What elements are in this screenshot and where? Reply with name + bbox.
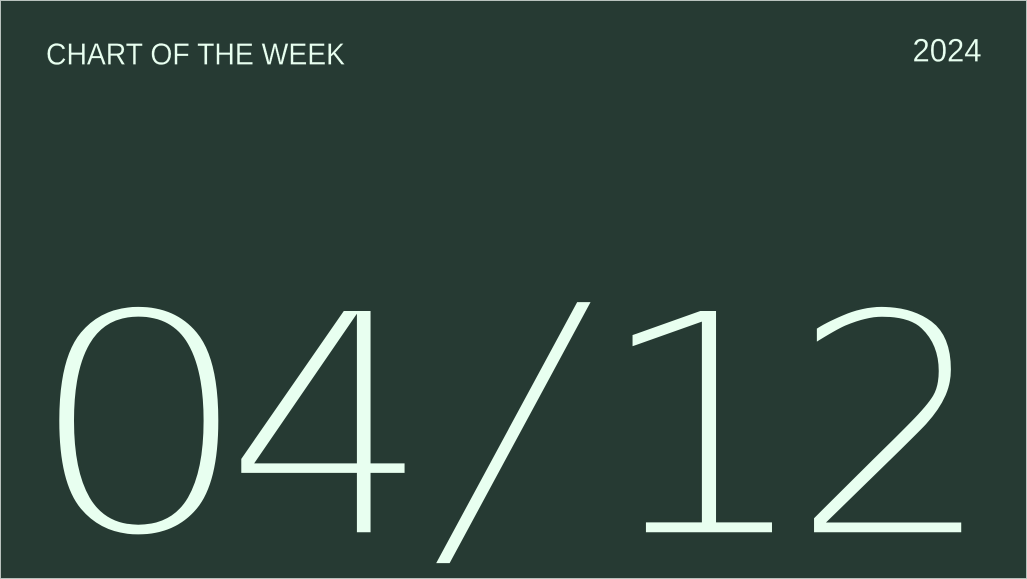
heading: chart of the week: CHART OF THE WEEK [46,36,345,72]
large date: 04/12 [26,290,995,578]
year label: 2024 [912,32,982,68]
